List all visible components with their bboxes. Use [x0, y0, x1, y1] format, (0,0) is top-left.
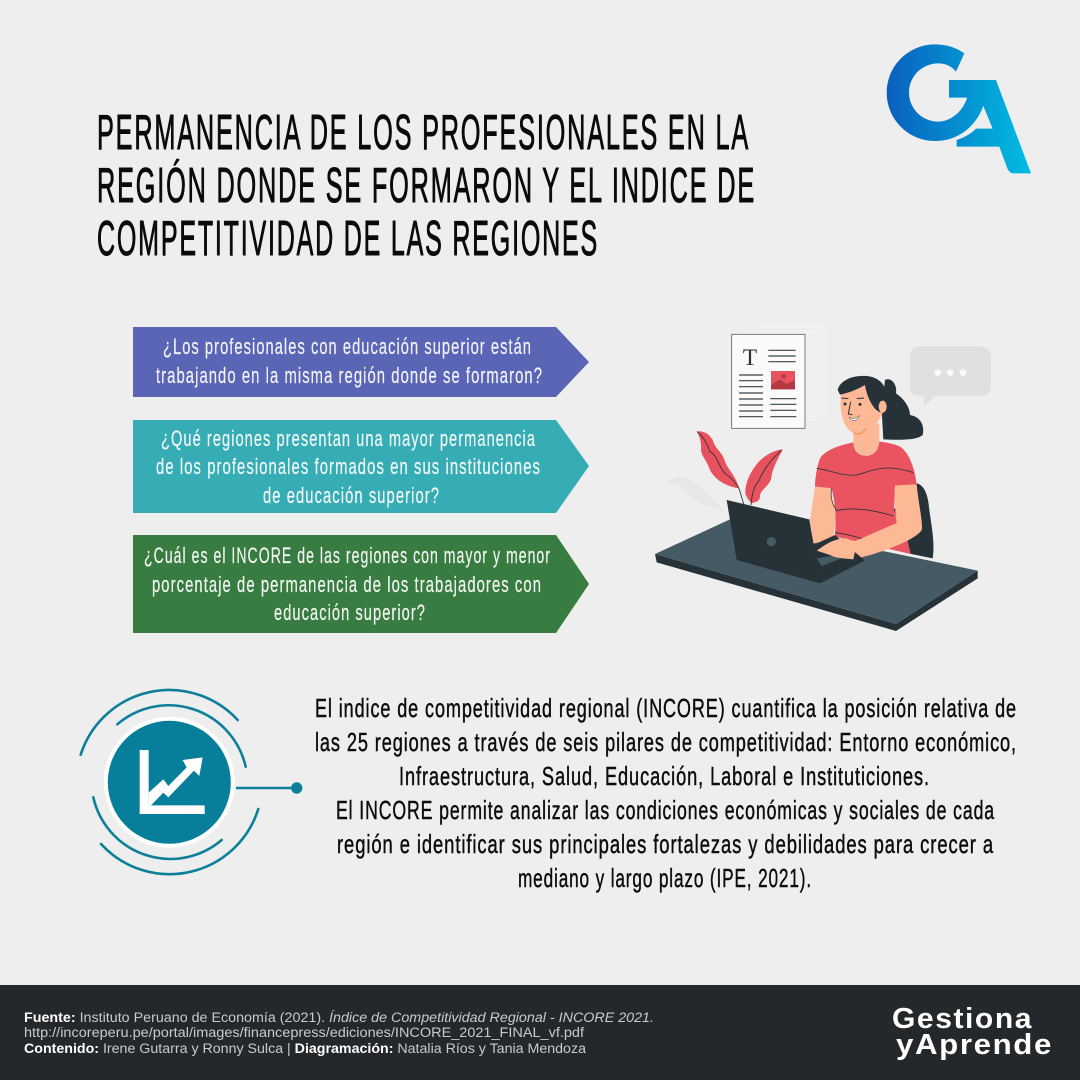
panel: question arrow 3: [133, 535, 589, 633]
title: [97, 106, 756, 266]
panel: question arrow 3: ¿Cuál es el INCORE de las regiones con mayor y menor: [144, 543, 551, 568]
panel: question arrow 2: ¿Qué regiones presentan una mayor permanencia: [161, 426, 536, 451]
logo: GA: [887, 44, 1031, 173]
icon: document: [732, 322, 830, 428]
footer credits: [24, 1010, 654, 1056]
title: COMPETITIVIDAD DE LAS REGIONES: [97, 212, 599, 266]
panel: question arrow 3: educación superior?: [274, 600, 426, 625]
icon: plant leaves: [668, 431, 783, 512]
footer credits: http://incoreperu.pe/portal/images/financepress/ediciones/INCORE_2021_FINAL_vf.pdf: [24, 1025, 584, 1040]
footer brand: [892, 1003, 1053, 1061]
icon: growth chart badge: [81, 690, 302, 874]
table: [655, 519, 978, 631]
woman: [810, 376, 923, 559]
panel: question arrow 2: de educación superior?: [263, 483, 440, 508]
panel: question arrow 1: [133, 327, 589, 397]
text block: INCORE description: mediano y largo plazo (IPE, 2021).: [518, 863, 812, 893]
text block: INCORE description: [315, 693, 1017, 893]
laptop: [727, 500, 865, 583]
footer brand: Gestiona: [892, 1003, 1033, 1035]
icon: chair: [893, 483, 933, 558]
panel: question arrow 3: porcentaje de permanencia de los trabajadores con: [152, 572, 542, 597]
footer credits: Contenido: Irene Gutarra y Ronny Sulca | Diagramación: Natalia Ríos y Tania Mendoza: [24, 1041, 587, 1056]
panel: question arrow 2: [133, 420, 589, 513]
panel: question arrow 2: de los profesionales formados en sus instituciones: [156, 454, 541, 479]
panel: question arrow 1: trabajando en la misma región donde se formaron?: [156, 363, 543, 388]
footer brand: yAprende: [896, 1029, 1053, 1061]
illustration: woman working at laptop: [655, 322, 991, 631]
icon: document: T: [743, 345, 757, 371]
footer credits: Fuente: Instituto Peruano de Economía (2021). Índice de Competitividad Regional - INCORE 2021.: [24, 1010, 654, 1025]
panel: question arrow 1: ¿Los profesionales con educación superior están: [163, 334, 532, 359]
footer bar: [0, 985, 1080, 1080]
icon: speech bubble: [910, 347, 991, 407]
